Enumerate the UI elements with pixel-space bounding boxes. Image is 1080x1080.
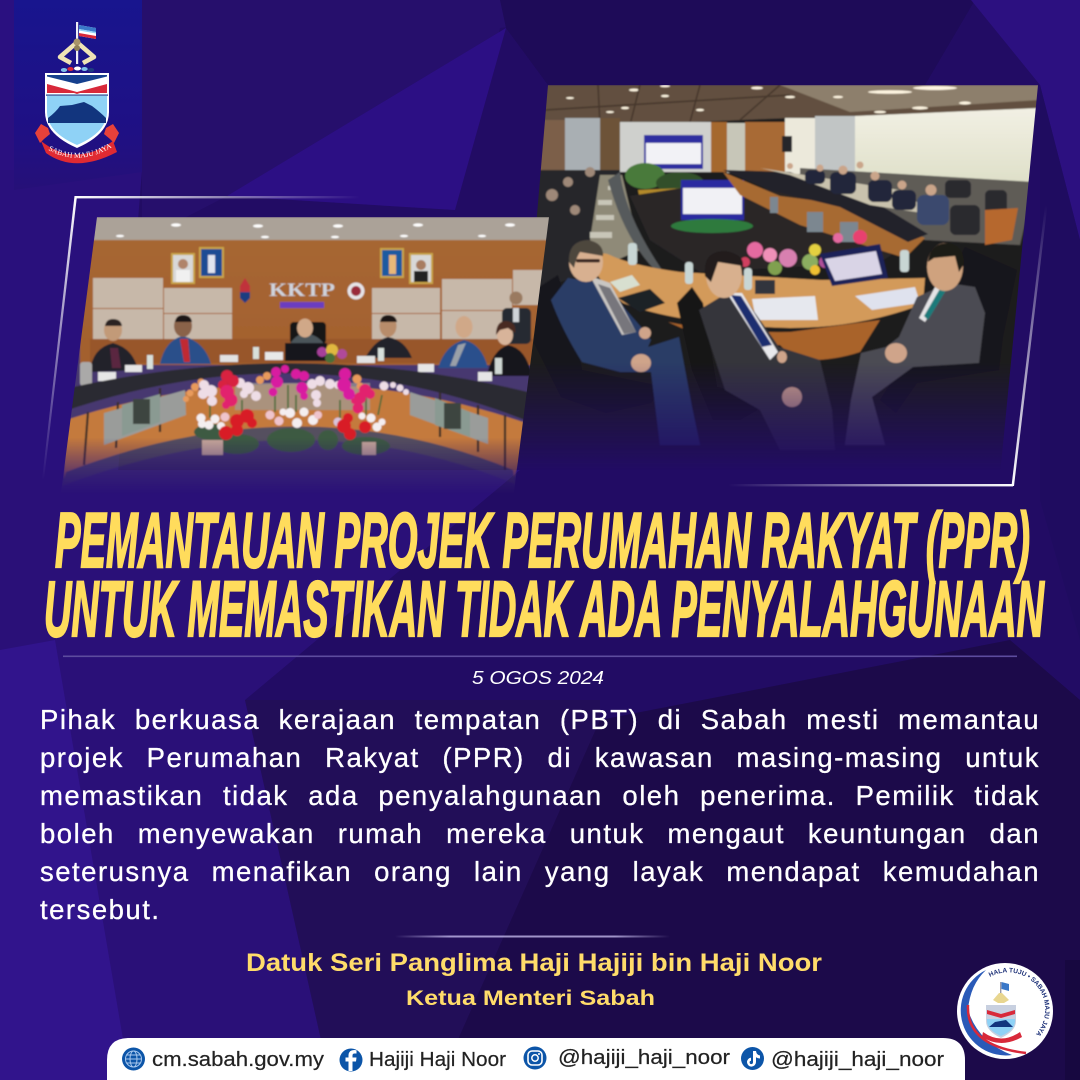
KKTP sign: KKTP	[269, 280, 335, 301]
pots	[202, 440, 376, 455]
wood wall	[80, 240, 555, 365]
body paragraph: seterusnya menafikan orang lain yang layak mendapat kemudahan	[40, 856, 1040, 887]
flower arrangement	[183, 365, 409, 455]
small center bouquet	[317, 344, 347, 363]
left-hand delegates	[530, 167, 640, 290]
curved dark table top	[60, 363, 540, 422]
crossed arms and hands	[60, 38, 94, 63]
chair: left	[540, 276, 560, 289]
scroll with motto: SABAH MAJU JAYA	[48, 144, 112, 158]
facebook name: Hajiji Haji Noor	[369, 1049, 506, 1071]
divider above signature	[395, 936, 670, 938]
body paragraph: tersebut.	[40, 894, 161, 925]
icon: facebook	[340, 1048, 362, 1072]
seated delegates	[90, 315, 532, 376]
floor	[630, 187, 891, 272]
glass panels	[104, 383, 488, 445]
date: 5 OGOS 2024	[472, 667, 604, 688]
body paragraph: boleh menyewakan rumah mereka untuk mengaut keuntungan dan	[40, 818, 1040, 849]
chair: middle	[676, 286, 710, 342]
panel base strip	[62, 426, 515, 486]
ceiling	[545, 85, 1036, 122]
back screen	[644, 135, 703, 169]
KKTP sign	[240, 278, 364, 308]
curved gray table front	[608, 172, 662, 270]
photo: delegates at conference table with three leaders in front	[518, 85, 1038, 458]
front screen	[820, 244, 888, 286]
body paragraph: projek Perumahan Rakyat (PPR) di kawasan masing-masing untuk	[40, 742, 1040, 773]
red-magenta orchids	[218, 370, 239, 390]
items on table	[80, 347, 502, 386]
man: left seated in navy suit	[551, 240, 700, 445]
flowers on table	[740, 230, 867, 275]
website: cm.sabah.gov.my	[152, 1049, 324, 1071]
divider under title	[63, 656, 1017, 657]
plants	[625, 163, 665, 189]
standing man	[502, 292, 531, 344]
right-hand delegates	[787, 162, 1018, 245]
beads	[61, 66, 94, 72]
white frame: right photo	[728, 205, 1048, 486]
speaker name: Datuk Seri Panglima Haji Hajiji bin Haji Noor	[246, 949, 822, 977]
tiktok handle: @hajiji_haji_noor	[771, 1049, 944, 1071]
white-pink orchids	[198, 376, 409, 407]
badge: Hala Tuju Sabah Maju Jaya: HALA TUJU • SABAH MAJU JAYA	[988, 968, 1050, 1036]
leaves	[194, 424, 390, 455]
lower orange front panels	[64, 384, 532, 482]
instagram handle: @hajiji_haji_noor	[558, 1047, 730, 1069]
man: middle seated in charcoal suit	[699, 251, 835, 450]
icon: instagram	[524, 1046, 546, 1070]
white frame: left photo	[42, 196, 360, 480]
speaker title: Ketua Menteri Sabah	[406, 986, 655, 1010]
middle screen	[681, 180, 744, 220]
orchid stems	[210, 385, 382, 418]
photo: KKTP meeting room with flowers	[55, 217, 555, 502]
beige panels	[93, 270, 549, 339]
body paragraph: memastikan tidak ada penyalahgunaan oleh penerima. Pemilik tidak	[40, 780, 1040, 811]
walls and windows	[540, 120, 566, 171]
chair: right	[880, 247, 1017, 413]
bottles	[628, 243, 909, 290]
contact bar	[107, 1038, 965, 1080]
main tabletop	[590, 253, 925, 328]
scroll with motto	[35, 124, 119, 164]
shield	[45, 73, 109, 148]
framed portraits	[171, 247, 433, 284]
flag	[76, 22, 96, 64]
ceiling	[90, 217, 555, 241]
icon: tiktok	[741, 1047, 764, 1070]
icon: globe	[122, 1048, 145, 1070]
body paragraph	[40, 704, 1040, 925]
logo: Sabah coat of arms	[35, 22, 119, 164]
red geraniums	[219, 409, 371, 440]
body paragraph: Pihak berkuasa kerajaan tempatan (PBT) di Sabah mesti memantau	[40, 704, 1040, 735]
white blooms	[196, 408, 386, 432]
man: right seated in gray suit	[845, 243, 985, 445]
badge: Hala Tuju Sabah Maju Jaya	[957, 963, 1053, 1059]
title	[44, 496, 1045, 653]
orange orchids	[183, 372, 364, 402]
right-hand table row	[723, 172, 925, 258]
papers on table	[752, 296, 818, 320]
